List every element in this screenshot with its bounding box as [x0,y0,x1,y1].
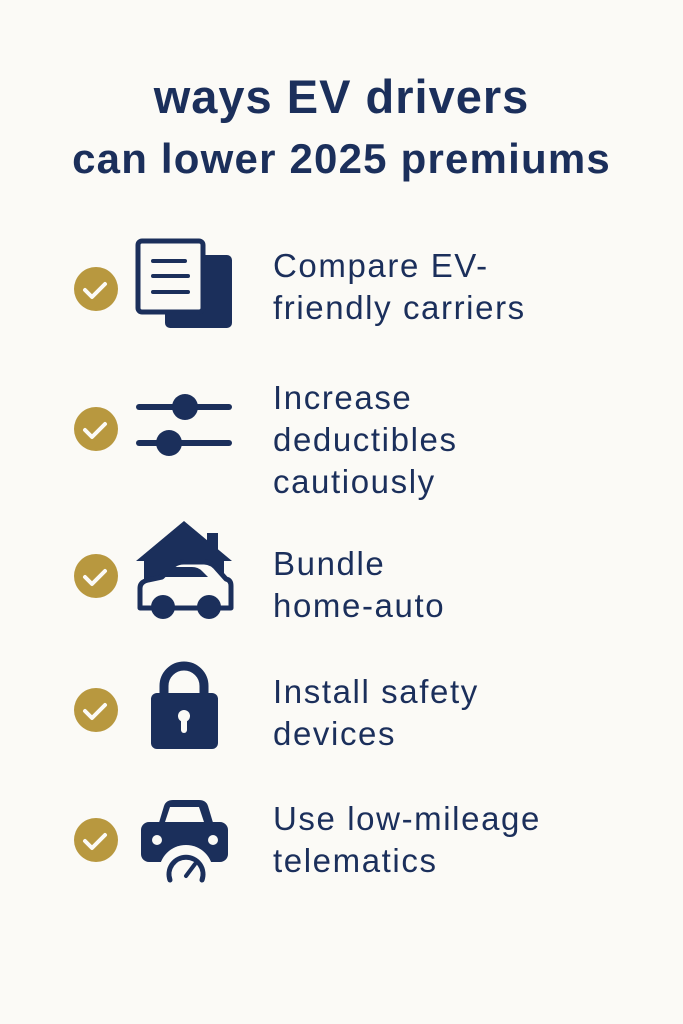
text: bundle: home-auto [273,587,445,624]
title: can lower 2025 premiums [72,135,611,182]
text: compare carriers: Compare EV- [273,247,489,284]
text: deductibles: deductibles [273,421,458,458]
title [72,70,611,182]
text: telematics [273,800,541,879]
text: compare carriers [273,247,526,326]
text: deductibles: cautiously [273,463,436,500]
text: deductibles: Increase [273,379,412,416]
title: ways EV drivers [154,70,529,123]
text: compare carriers: friendly carriers [273,289,526,326]
text: bundle [273,545,445,624]
text: safety devices: Install safety [273,673,479,710]
text: telematics: telematics [273,842,438,879]
text: telematics: Use low-mileage [273,800,541,837]
text: safety devices: devices [273,715,396,752]
text: deductibles [273,379,458,500]
checkmarks [74,267,118,862]
text: safety devices [273,673,479,752]
text: bundle: Bundle [273,545,385,582]
